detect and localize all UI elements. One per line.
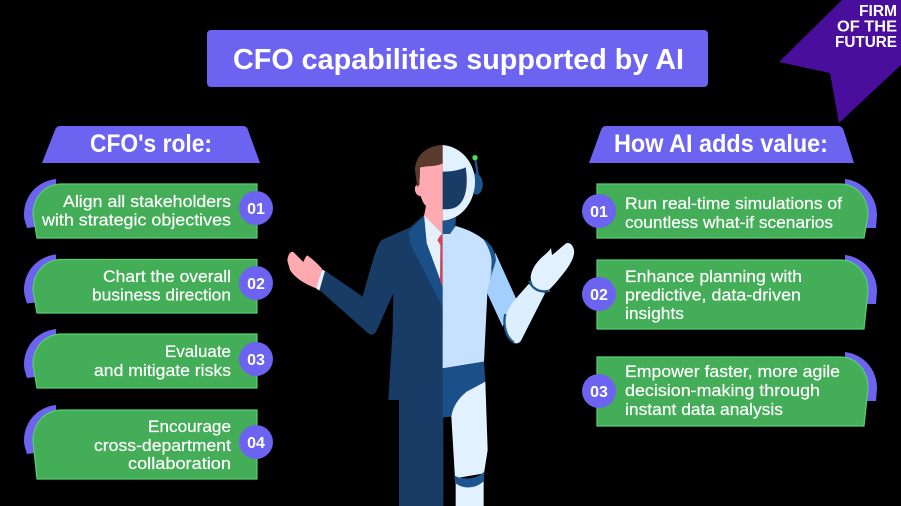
antenna light — [472, 155, 478, 160]
panel: AI value 02: 02 — [590, 287, 608, 304]
elbow trim — [504, 314, 514, 343]
panel: CFO role 01: 01 — [247, 201, 265, 218]
panel: AI value 02: Enhance planning with — [625, 267, 802, 286]
panel: CFO role 04: 04 — [247, 435, 265, 452]
panel: AI value 03: decision-making through — [625, 381, 820, 400]
robot torso — [443, 226, 492, 368]
panel: AI value 02: insights — [625, 304, 684, 323]
suit — [319, 215, 443, 506]
logo: Firm of the Future — [779, 0, 901, 123]
panel: CFO role 04: collaboration — [128, 454, 231, 473]
panel: CFO role 02 — [24, 254, 273, 313]
panel: CFO role 01: Align all stakeholders — [63, 192, 231, 211]
panel: AI value 02 — [582, 255, 877, 329]
ear — [474, 173, 483, 195]
neck and face — [415, 163, 443, 234]
title — [207, 30, 708, 87]
shirt cuff — [316, 269, 325, 291]
heading: CFO's role: CFO's role: — [90, 130, 212, 158]
heading: How AI adds value — [589, 126, 854, 163]
tie — [437, 233, 443, 287]
wrist band — [529, 281, 550, 291]
heading: How AI adds value: How AI adds value: — [614, 130, 828, 158]
robot neck — [443, 217, 456, 234]
panel: CFO role 02: 02 — [247, 276, 265, 293]
panel: CFO role 01 — [24, 179, 273, 238]
logo: Firm of the Future: FUTURE — [835, 34, 897, 51]
panel: CFO role 04: Encourage — [148, 417, 231, 436]
panel: AI value 01: 01 — [590, 204, 608, 221]
panel: CFO role 03: and mitigate risks — [94, 361, 231, 380]
heading: CFO's role — [42, 126, 260, 163]
panel: CFO role 04 — [24, 405, 273, 479]
panel: AI value 01 — [582, 179, 877, 238]
left hand — [287, 252, 322, 289]
panel: AI value 01: Run real-time simulations of — [625, 194, 842, 213]
title: CFO capabilities supported by AI — [233, 44, 684, 76]
robot upper arm — [487, 253, 516, 327]
robot hand — [531, 243, 574, 293]
hair — [415, 145, 443, 187]
panel: CFO role 04: cross-department — [94, 436, 231, 455]
shirt — [424, 215, 443, 287]
robot hip — [443, 362, 485, 417]
panel: CFO role 03 — [24, 329, 273, 388]
robot forearm — [505, 284, 545, 343]
robot head — [443, 145, 475, 221]
panel: AI value 03 — [582, 352, 877, 426]
knee band — [454, 471, 484, 487]
illustration: half businessman, half robot — [287, 145, 574, 506]
robot thigh — [451, 382, 488, 478]
panel: AI value 03: instant data analysis — [625, 400, 783, 419]
antenna stalk — [475, 159, 478, 175]
visor — [443, 167, 467, 209]
panel: CFO role 01: with strategic objectives — [41, 210, 231, 230]
panel: AI value 03: 03 — [590, 384, 608, 401]
logo: Firm of the Future: FIRM — [859, 3, 897, 20]
panel: CFO role 02: Chart the overall — [103, 267, 231, 286]
logo: Firm of the Future: OF THE — [837, 18, 897, 36]
panel: AI value 01: countless what-if scenarios — [625, 213, 833, 232]
robot shin — [456, 482, 484, 506]
panel: CFO role 02: business direction — [92, 286, 231, 304]
panel: AI value 02: predictive, data-driven — [625, 286, 801, 304]
panel: CFO role 03: Evaluate — [165, 342, 231, 361]
lapel — [409, 216, 443, 307]
panel: AI value 03: Empower faster, more agile — [625, 362, 840, 381]
shoulder trim — [483, 238, 496, 280]
panel: CFO role 03: 03 — [247, 352, 265, 369]
